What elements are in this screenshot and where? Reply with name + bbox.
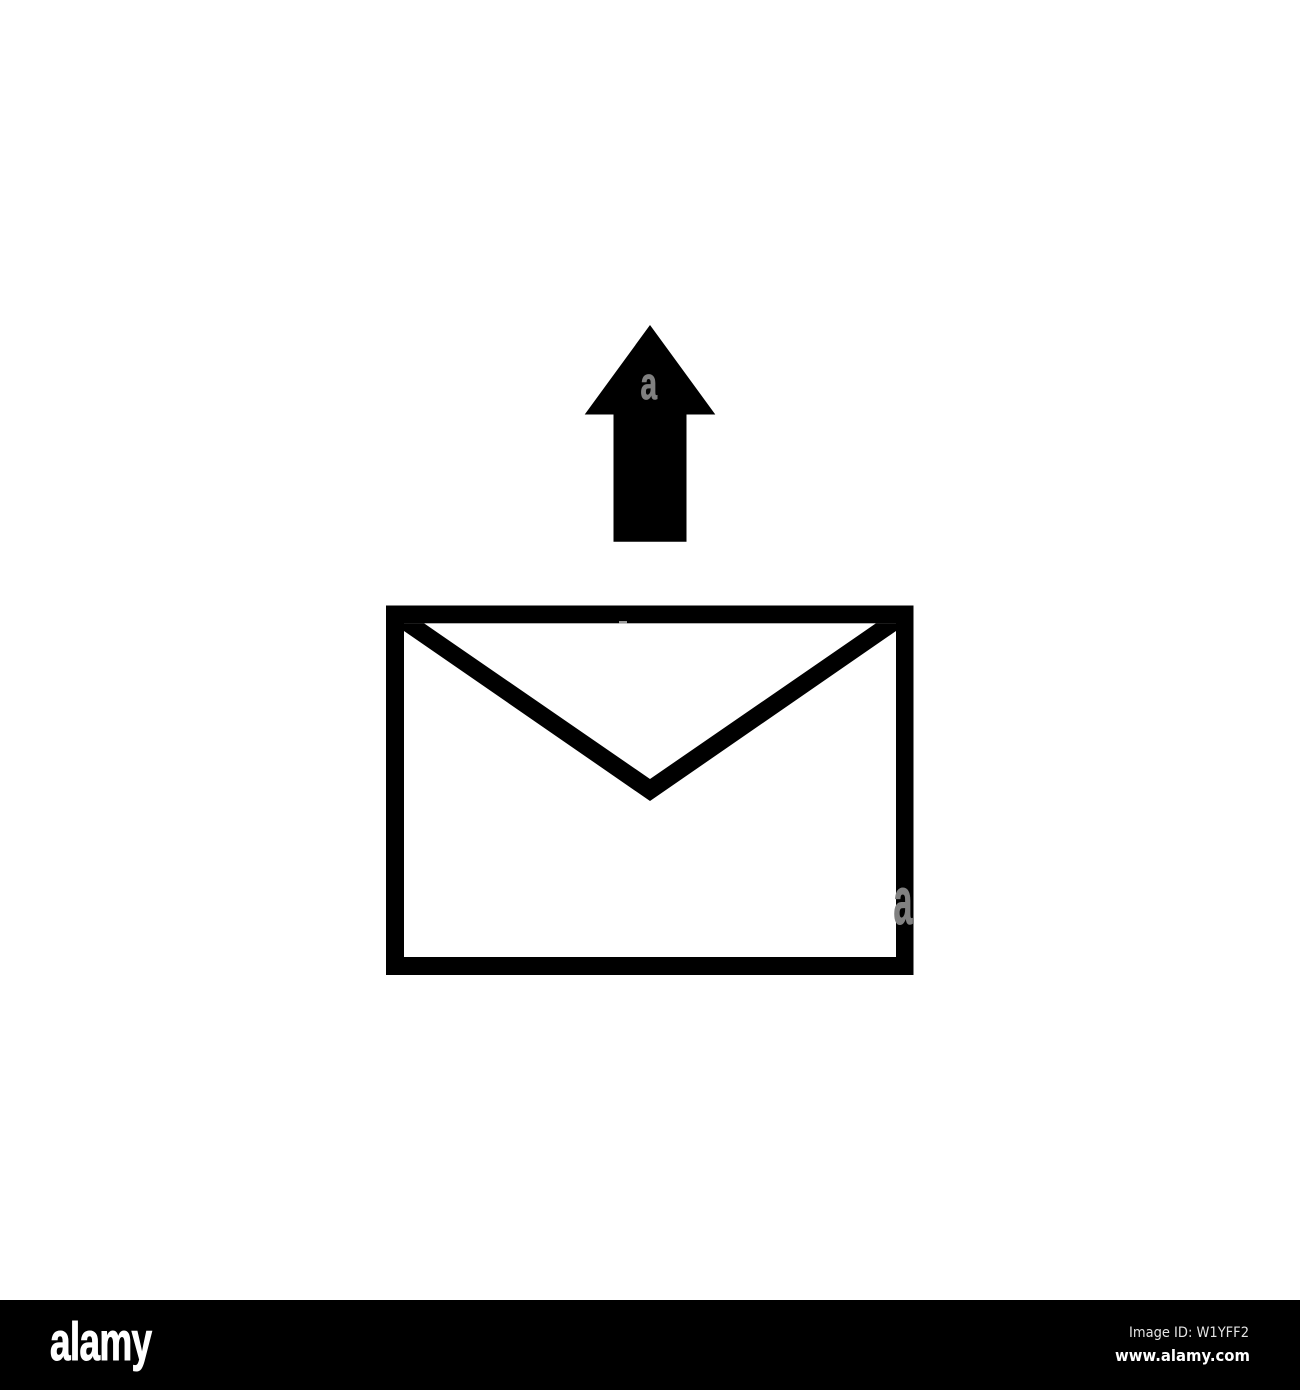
logo: alamy: alamy [50,1312,152,1372]
watermark letter on envelope edge: a [894,865,913,939]
image id: Image ID: W1YFF2 [1129,1325,1249,1341]
footer bar [0,1300,1300,1390]
watermark letter on arrow: a [640,359,658,410]
icon: envelope [386,606,914,975]
watermark fragment at envelope top [619,621,627,623]
icon: upward arrow [585,325,715,542]
website url: www.alamy.com [1115,1346,1250,1365]
